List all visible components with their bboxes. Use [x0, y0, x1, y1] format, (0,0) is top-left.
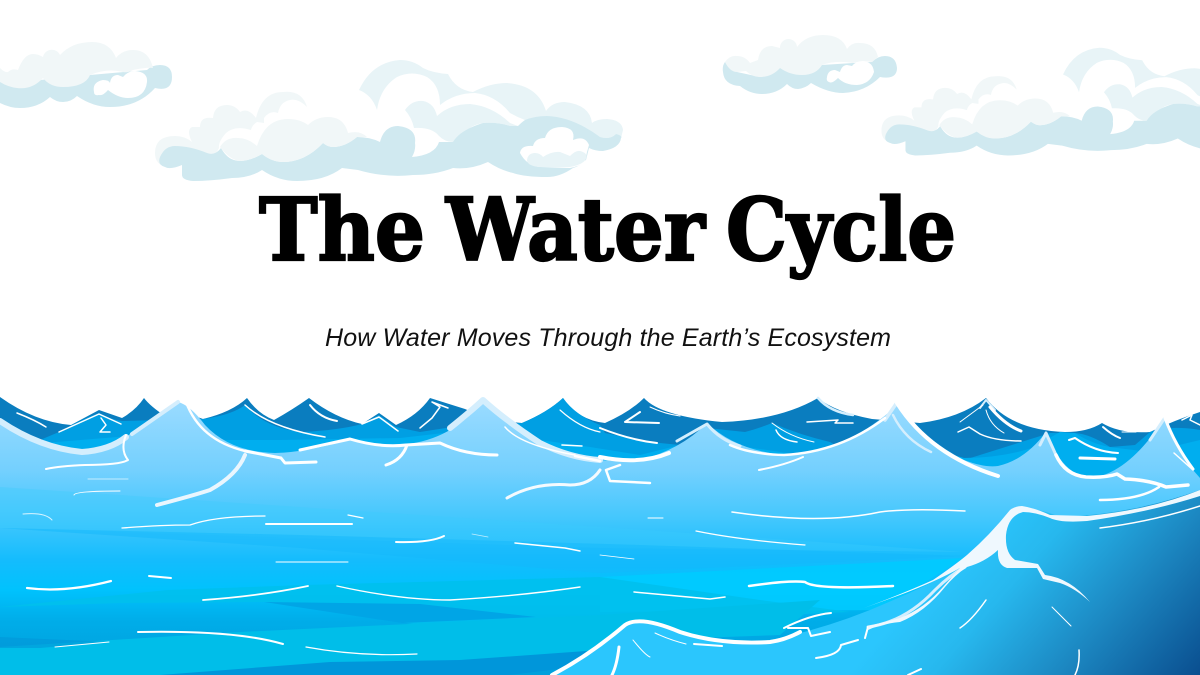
cloud: large centre [155, 60, 623, 181]
cloud: top centre [723, 35, 897, 94]
ocean waves [0, 397, 1200, 675]
clouds [0, 35, 1200, 181]
swell crest foam [853, 490, 1200, 630]
subtitle: How Water Moves Through the Earth’s Ecosystem [325, 324, 891, 352]
cloud: top right [881, 48, 1200, 155]
bright blue layer [0, 430, 1200, 490]
title [259, 180, 956, 281]
water colour bands [0, 487, 964, 675]
back wave layer [0, 397, 1200, 500]
title: The [259, 180, 425, 281]
white foam lines [17, 402, 1200, 675]
title: Water [445, 180, 707, 281]
cloud: top left [0, 42, 172, 108]
pale wave crests [0, 398, 1164, 627]
title: Cycle [726, 180, 956, 281]
front wave [0, 402, 1200, 675]
foreground swell [550, 490, 1200, 675]
middle wave layer [0, 398, 1200, 500]
